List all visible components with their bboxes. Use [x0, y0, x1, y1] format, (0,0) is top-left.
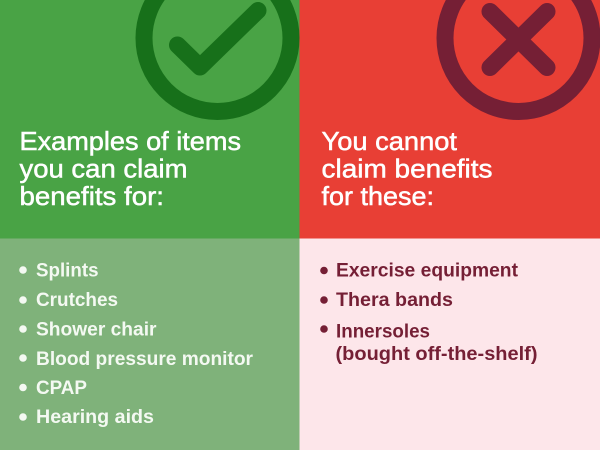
list item: CPAP: CPAP [36, 377, 87, 399]
heading: can claim: Examples of items [20, 126, 241, 156]
panel: cannot claim header [300, 0, 600, 238]
list item: Blood pressure monitor: Blood pressure monitor [36, 348, 253, 370]
panel: cannot claim list [300, 238, 600, 450]
heading: cannot claim: for these: [322, 181, 434, 211]
list item: Innersoles bought off-the-shelf: Innersoles [336, 320, 430, 342]
panel: can claim list [0, 238, 300, 450]
icon: check mark in circle [144, 0, 291, 112]
list item: Shower chair: Shower chair [36, 318, 157, 340]
list item: Hearing aids: Hearing aids [36, 406, 154, 428]
heading: can claim: benefits for: [20, 181, 164, 211]
heading: can claim [20, 126, 241, 211]
list item: Splints: Splints [36, 260, 99, 282]
list item: Exercise equipment: Exercise equipment [336, 260, 518, 282]
heading: cannot claim: claim benefits [322, 154, 492, 184]
panel: can claim header [0, 0, 300, 238]
list item: Innersoles bought off-the-shelf [320, 320, 538, 365]
list item: Crutches: Crutches [36, 289, 118, 311]
heading: cannot claim: You cannot [322, 126, 458, 156]
icon: cross in circle [445, 0, 592, 112]
heading: can claim: you can claim [20, 154, 188, 184]
heading: cannot claim [322, 126, 492, 211]
list item: Innersoles bought off-the-shelf: (bought off-the-shelf) [336, 343, 538, 365]
list item: Thera bands: Thera bands [336, 289, 453, 311]
